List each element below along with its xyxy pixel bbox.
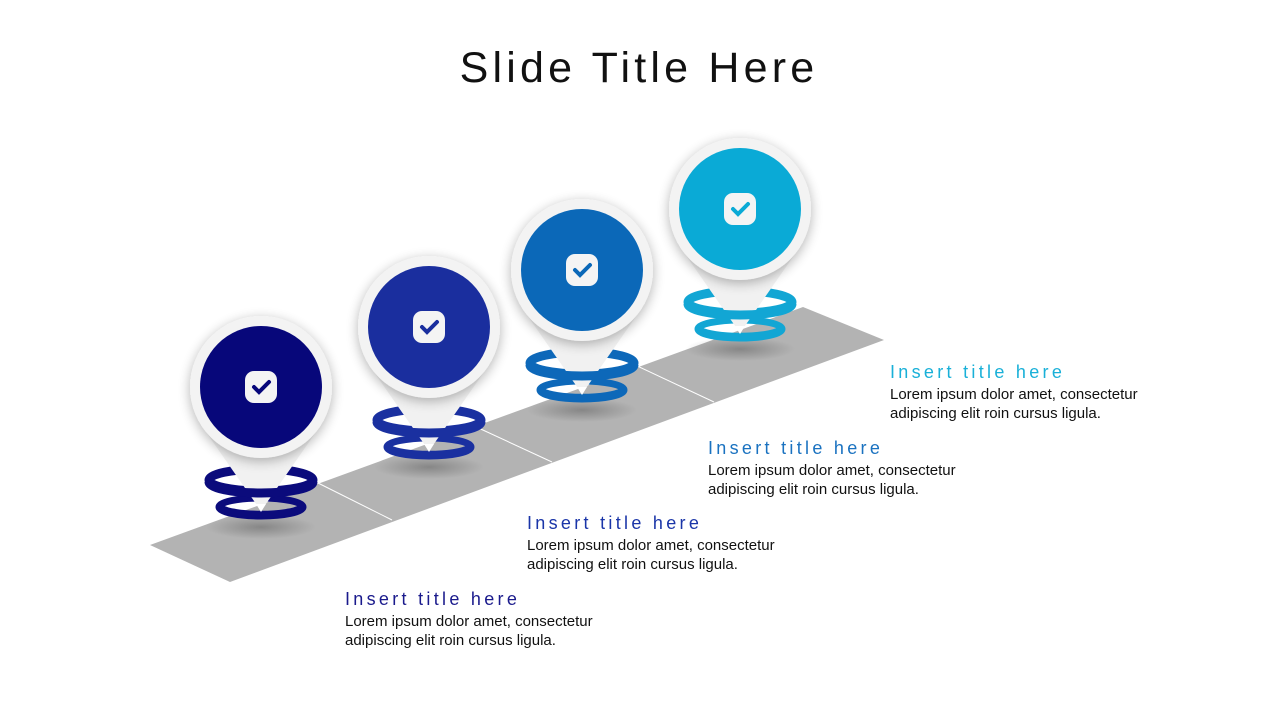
- text block 1: Insert title here: [345, 589, 520, 609]
- text block 3: [708, 438, 956, 498]
- text block 4: Lorem ipsum dolor amet, consectetur: [890, 386, 1138, 403]
- text block 2: [527, 513, 775, 573]
- road: [150, 307, 884, 582]
- title: Slide Title Here: [460, 44, 818, 92]
- text block 2: Insert title here: [527, 513, 702, 533]
- text block 1: Lorem ipsum dolor amet, consectetur: [345, 613, 593, 630]
- text block 3: Lorem ipsum dolor amet, consectetur: [708, 462, 956, 479]
- pin 3: [511, 199, 653, 422]
- pin 4: [669, 138, 811, 361]
- text block 1: [345, 589, 593, 649]
- text block 3: Insert title here: [708, 438, 883, 458]
- text block 4: Insert title here: [890, 362, 1065, 382]
- text block 4: adipiscing elit roin cursus ligula.: [890, 405, 1101, 422]
- text block 2: adipiscing elit roin cursus ligula.: [527, 556, 738, 573]
- pin 1: [190, 316, 332, 539]
- pin 2: [358, 256, 500, 479]
- text block 3: adipiscing elit roin cursus ligula.: [708, 481, 919, 498]
- text block 1: adipiscing elit roin cursus ligula.: [345, 632, 556, 649]
- text block 4: [890, 362, 1138, 422]
- text block 2: Lorem ipsum dolor amet, consectetur: [527, 537, 775, 554]
